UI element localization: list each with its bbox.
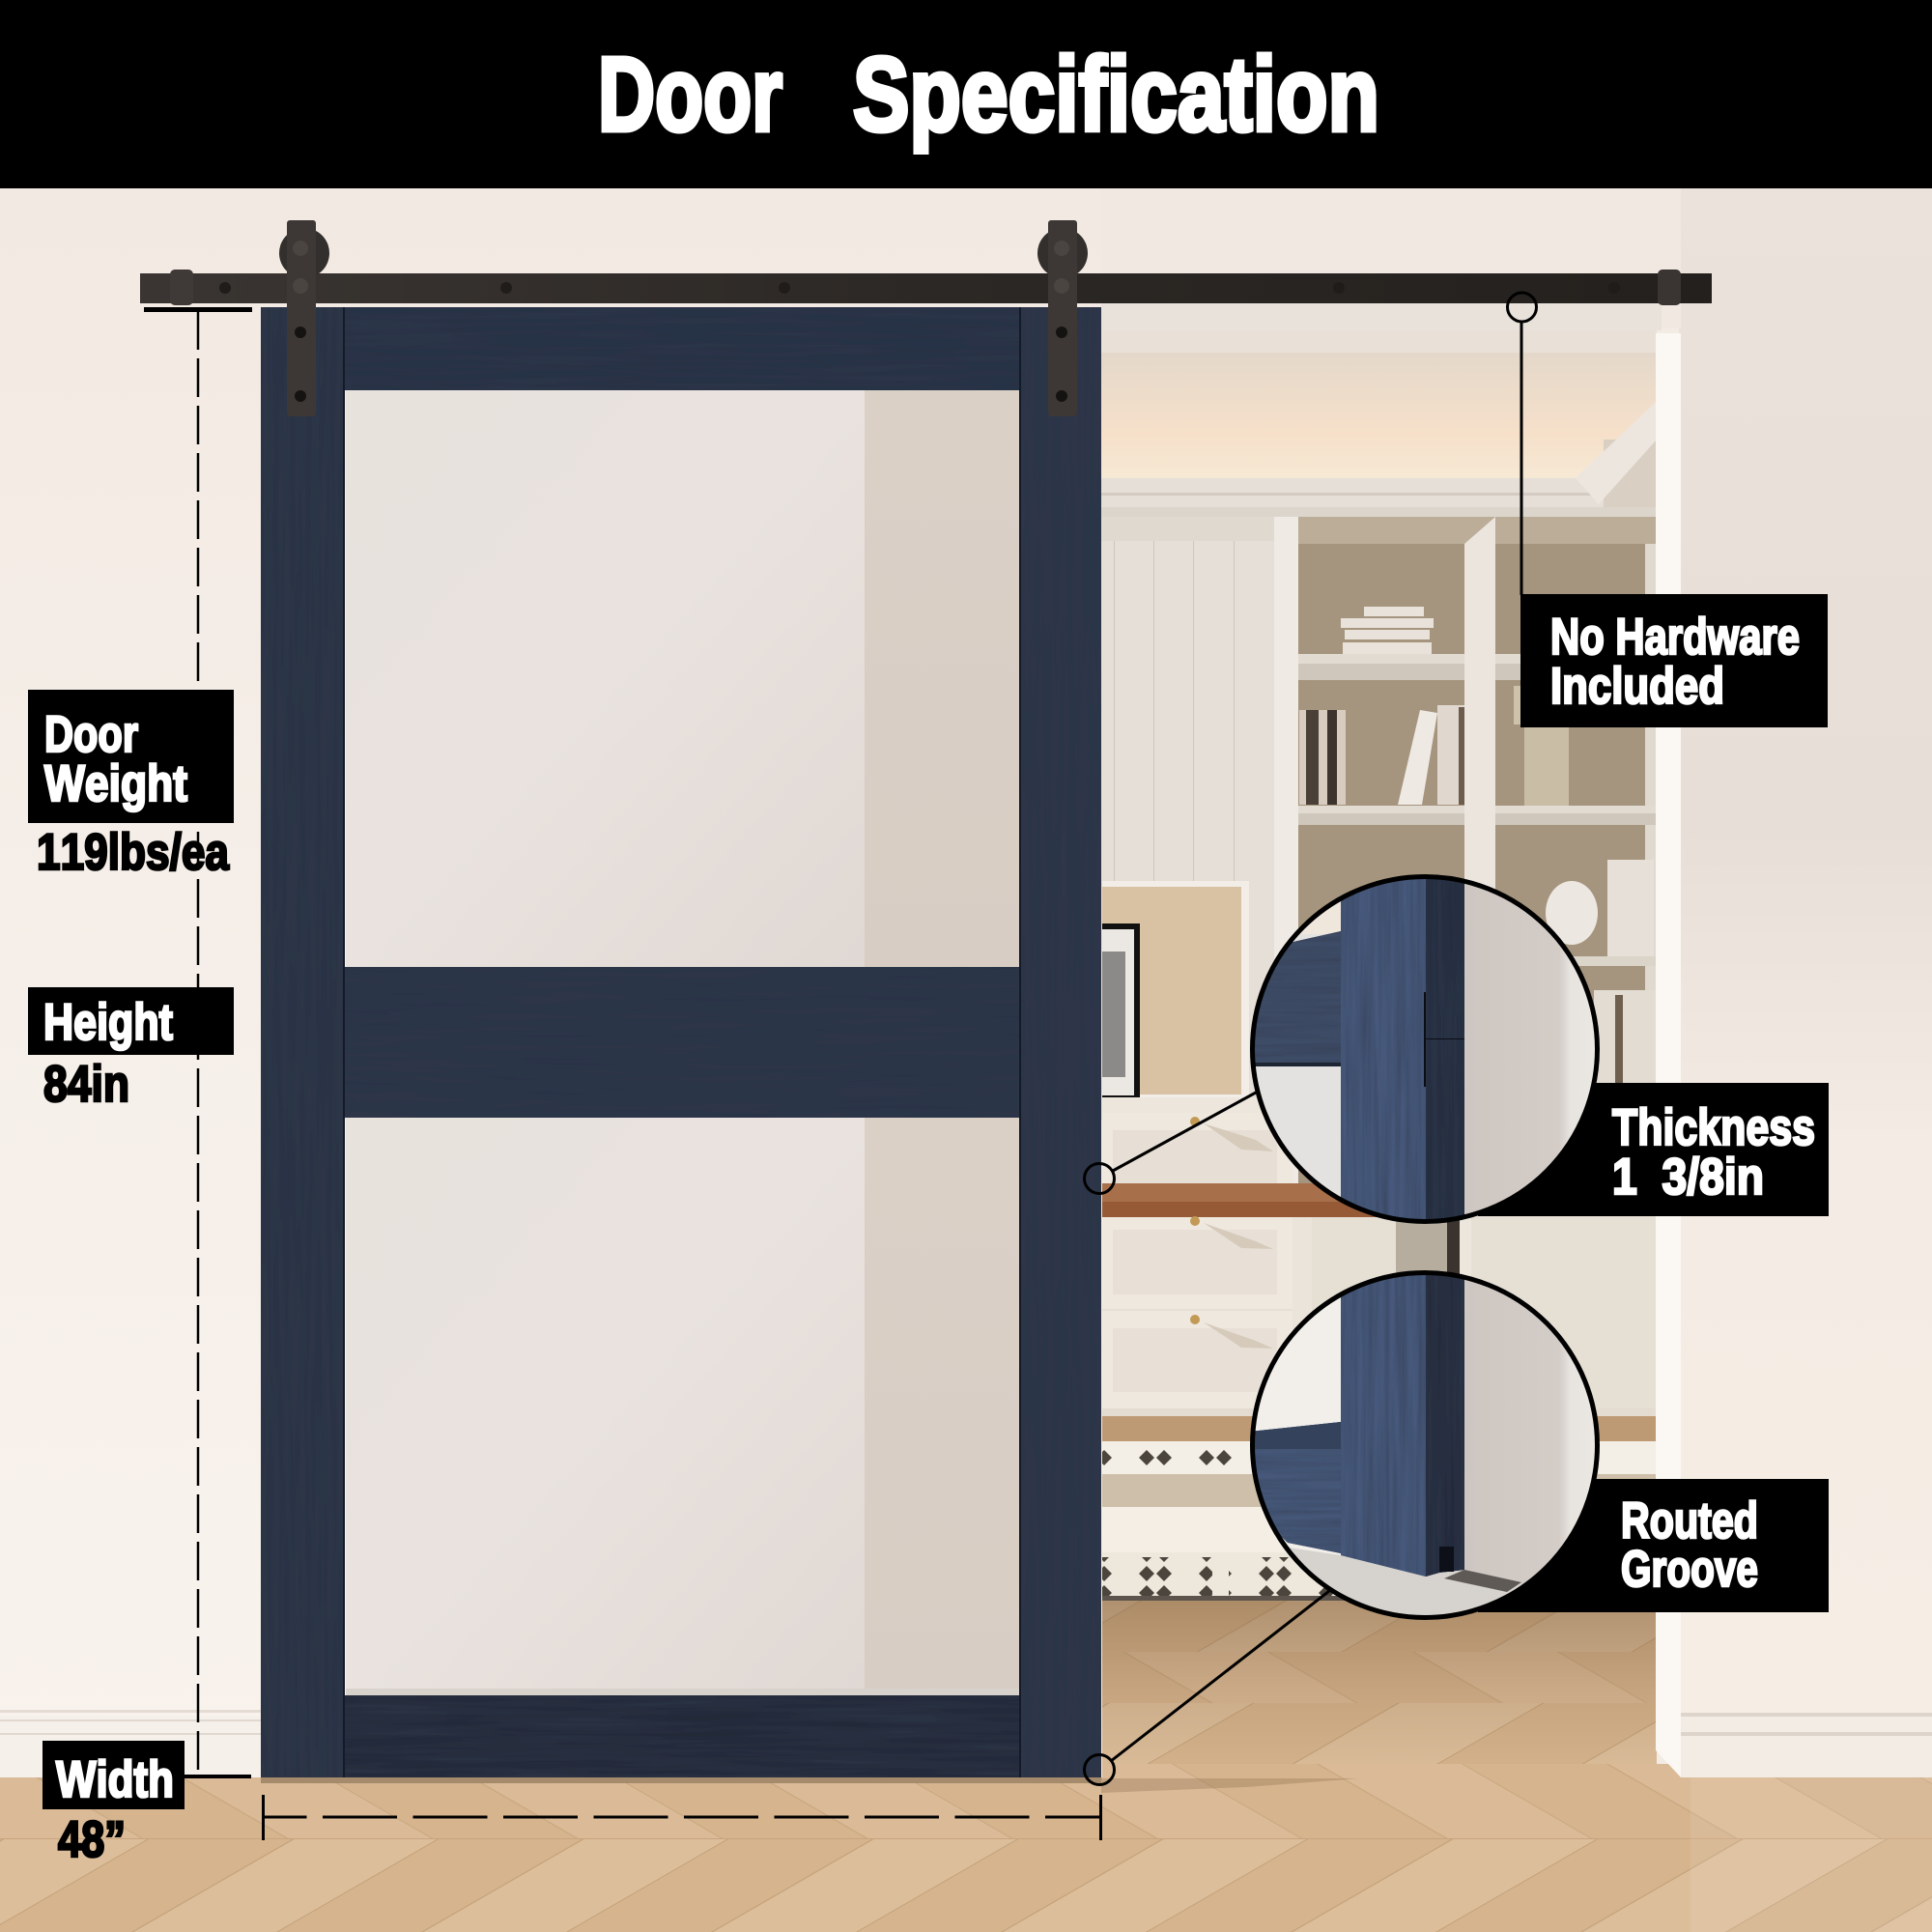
sliding track rail hardware [140, 220, 1712, 416]
title: Door [598, 36, 782, 154]
floor [0, 1777, 1932, 1932]
roller strap right [1037, 220, 1088, 416]
label: height [28, 987, 234, 1113]
label: width: Width [56, 1751, 174, 1808]
title [598, 36, 1379, 154]
title: Specification [853, 36, 1379, 154]
width dimension line [262, 1795, 1102, 1840]
callout: no hardware included: No Hardware [1550, 609, 1800, 666]
label: door weight: 119lbs/ea [37, 824, 229, 881]
glass panels [346, 390, 1020, 1695]
label: width: 48” [58, 1811, 126, 1868]
callout: routed groove [1084, 1272, 1829, 1785]
label: height: 84in [43, 1056, 129, 1113]
callout: routed groove: Routed [1621, 1492, 1758, 1549]
label: door weight: Door [44, 706, 138, 763]
detail circle: routed groove [1250, 1272, 1604, 1623]
label: width [43, 1741, 185, 1868]
room seen through doorway [1101, 330, 1681, 1778]
roller strap left [279, 220, 329, 416]
header bar [0, 0, 1932, 188]
door frame [261, 307, 1101, 1777]
label: height: Height [43, 994, 173, 1051]
callout: thickness: Thickness [1612, 1099, 1815, 1156]
detail circle: door edge [1250, 876, 1600, 1224]
callout: thickness: 1 3/8in [1612, 1149, 1764, 1206]
label: door weight: Weight [44, 755, 187, 812]
height dimension line [144, 307, 252, 1778]
label: door weight [28, 690, 234, 881]
callout: routed groove: Groove [1621, 1541, 1758, 1598]
callout: no hardware included: Included [1550, 658, 1724, 715]
callout: thickness [1084, 876, 1829, 1224]
callout: no hardware included [1507, 293, 1828, 727]
barn door [261, 307, 1101, 1777]
